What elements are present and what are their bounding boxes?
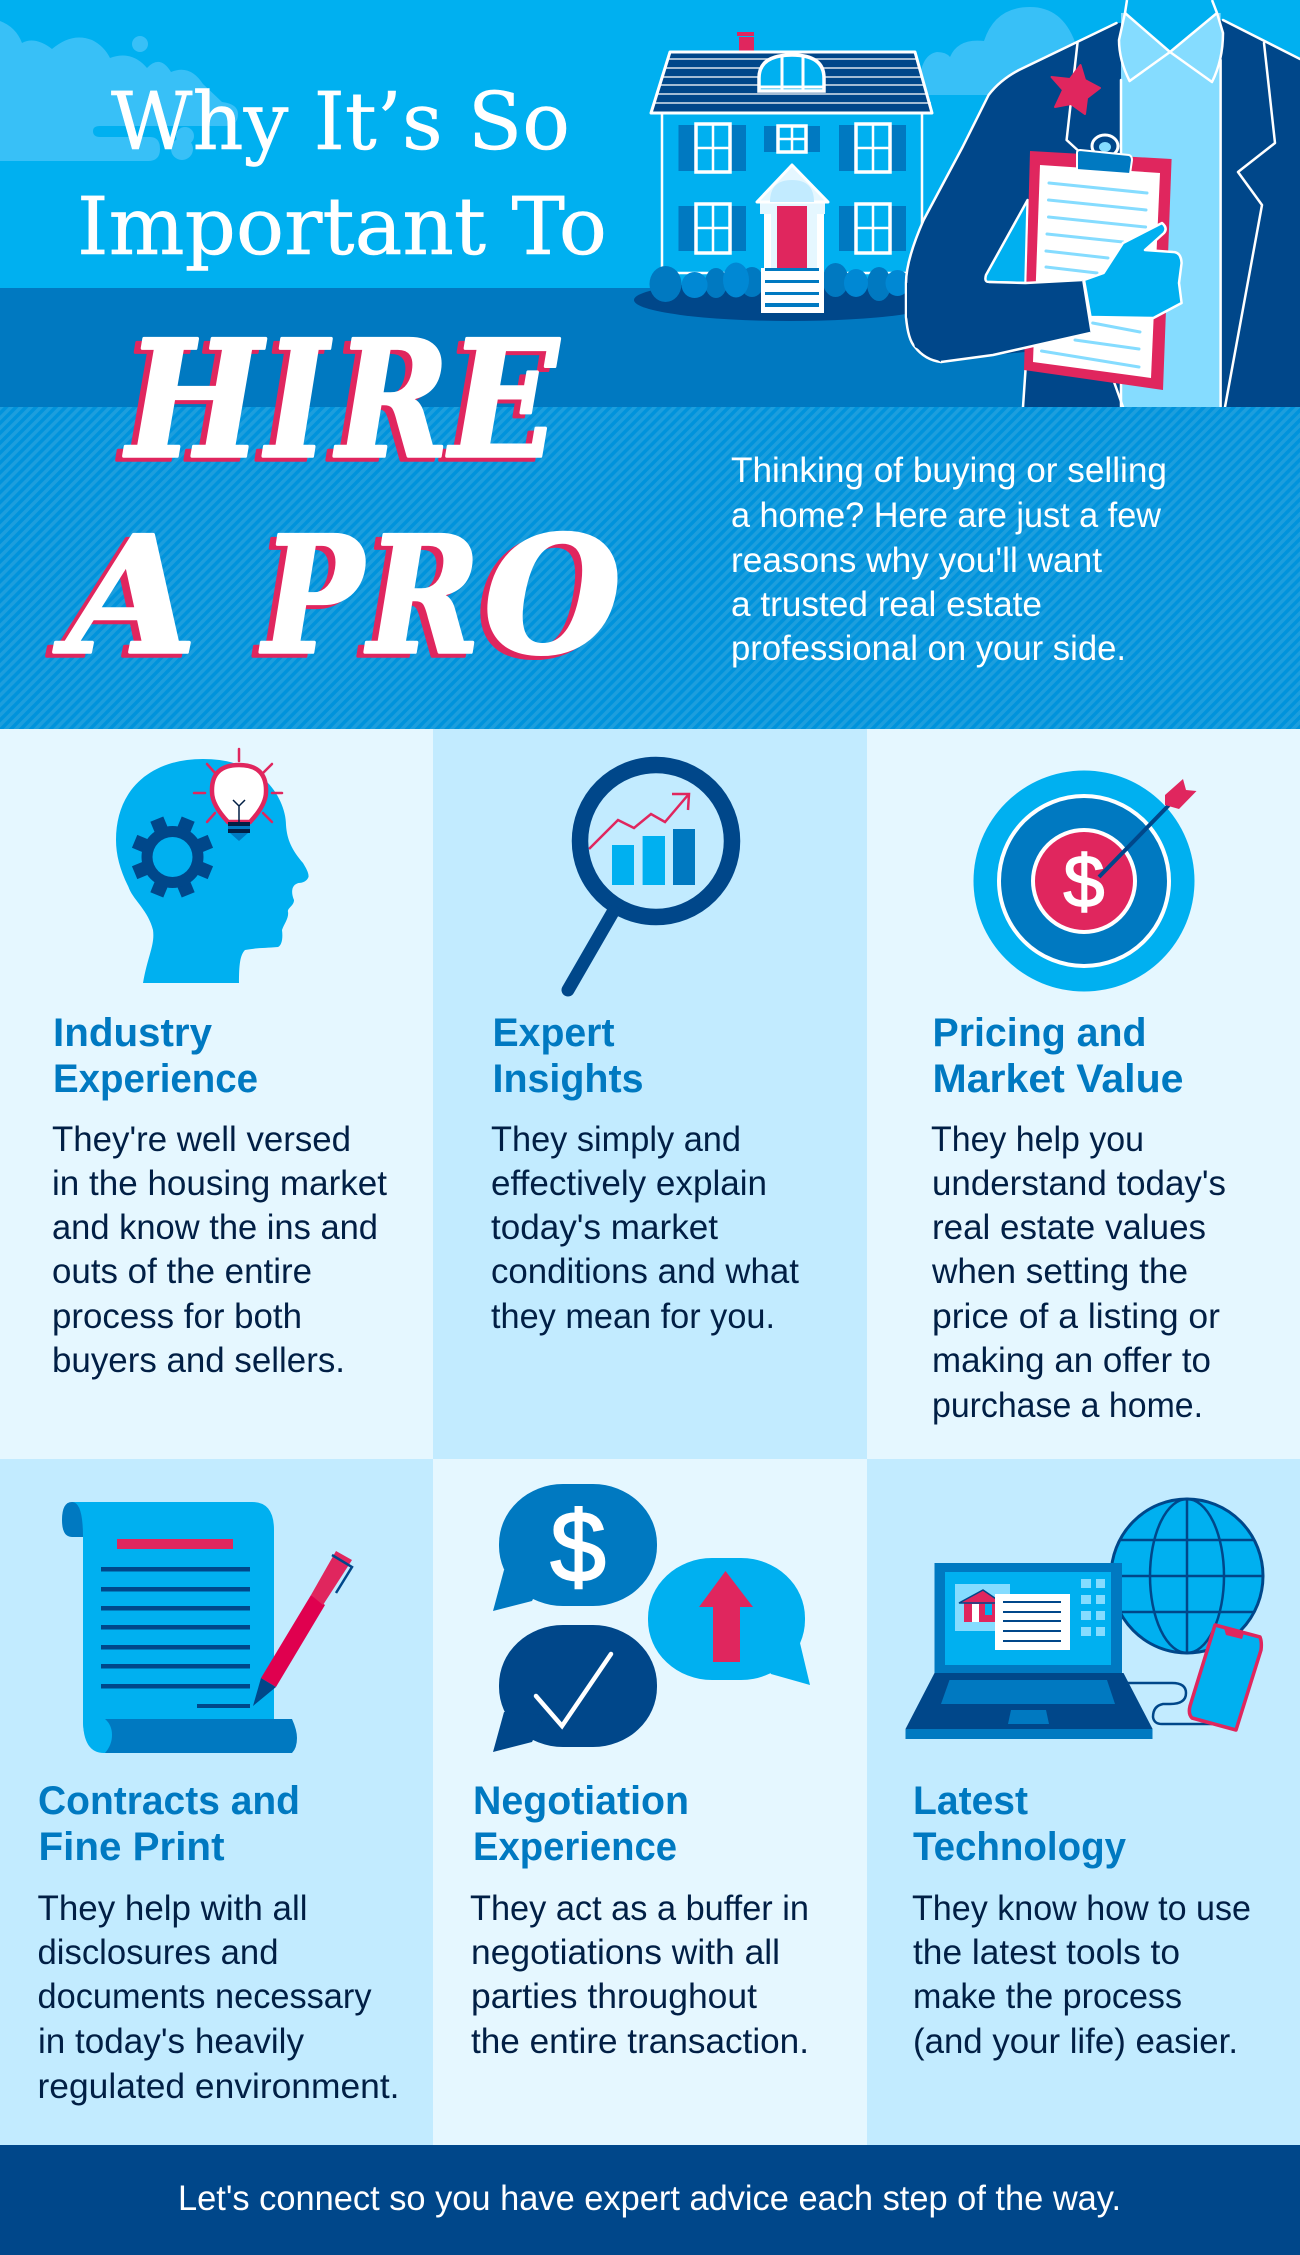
title: why it's so important to [77,75,607,273]
striped band background [0,407,1300,729]
icon: speech bubbles: $ [550,1491,606,1603]
decorative cloud right [919,7,1075,95]
heading: Experience [473,1825,677,1869]
heading: Contracts and [38,1779,300,1823]
body text: the entire transaction. [471,2022,809,2061]
heading [38,1779,300,1869]
body text: price of a listing or [932,1297,1220,1336]
body text: buyers and sellers. [52,1341,345,1380]
icon: laptop, globe and phone [906,1499,1263,1739]
body text: They act as a buffer in [470,1889,809,1928]
body text: in today's heavily [38,2022,304,2061]
icon: magnifying glass with chart [568,765,732,990]
body text [912,1889,1251,2061]
heading: Market Value [932,1057,1184,1101]
title: hire a pro: A [53,501,197,690]
heading: Fine Print [38,1825,224,1869]
panel: latest technology [867,1459,1300,2145]
intro text: professional on your side. [731,629,1126,668]
body text: regulated environment. [38,2067,399,2106]
panel: pricing and market value [867,729,1300,1459]
body text: negotiations with all [471,1933,780,1972]
body text: and know the ins and [52,1208,378,1247]
body text: documents necessary [38,1977,372,2016]
body text: disclosures and [38,1933,278,1972]
body text: conditions and what [491,1252,799,1291]
body text: they mean for you. [491,1297,775,1336]
title: hire a pro: E [446,305,560,494]
title: hire a pro: I [256,309,325,498]
panel: negotiation experience [433,1459,867,2145]
heading: Negotiation [473,1779,689,1823]
body text: They help you [931,1120,1144,1159]
title: hire a pro: R [327,309,442,498]
intro text: a trusted real estate [731,585,1042,624]
heading: Expert [492,1011,614,1055]
title: hire a pro: I [263,305,332,494]
body text: today's market [491,1208,718,1247]
heading: Insights [492,1057,644,1101]
body text: They're well versed [52,1120,351,1159]
body text: making an offer to [932,1341,1211,1380]
icon: head with gear and light bulb [116,749,309,983]
heading: Latest [913,1779,1028,1823]
body text: purchase a home. [932,1386,1203,1425]
title: why it's so important to: Why It’s So [111,75,570,168]
icon: target with dollar and arrow: $ [1063,840,1105,923]
body text [52,1120,387,1380]
intro text: Thinking of buying or selling [731,451,1167,490]
heading: Experience [53,1057,258,1101]
title: hire a pro: P [260,501,366,690]
body text: process for both [52,1297,302,1336]
intro text [731,451,1167,668]
title: hire a pro: E [439,309,553,498]
decorative cloud left [0,21,238,161]
title: hire a pro: H [123,305,266,494]
title: hire a pro: A [46,505,190,694]
heading [53,1011,258,1101]
icon: speech bubbles [493,1484,810,1752]
title: hire a pro: H [116,309,259,498]
body text: understand today's [932,1164,1226,1203]
body text [491,1120,799,1336]
heading [473,1779,689,1869]
title: hire a pro: R [334,305,449,494]
panel: contracts and fine print [0,1459,433,2145]
body text: when setting the [931,1252,1188,1291]
illustration: real estate agent with clipboard [906,0,1300,407]
body text: parties throughout [471,1977,757,2016]
panel: expert insights [433,729,867,1459]
footer banner: Let's connect so you have expert advice each step of the way. [178,2179,1121,2218]
footer banner [0,2145,1300,2255]
title: hire a pro: O [477,505,614,694]
icon: scroll document and pen [62,1502,352,1753]
illustration: house [634,32,946,321]
icon: target with dollar and arrow [974,770,1196,992]
title: why it's so important to: Important To [77,180,607,273]
title: hire a pro: P [253,505,359,694]
body text: outs of the entire [52,1252,312,1291]
body text: (and your life) easier. [913,2022,1238,2061]
title: hire a pro: R [358,505,473,694]
body text: in the housing market [52,1164,387,1203]
title: hire a pro [46,305,621,694]
heading [913,1779,1127,1869]
header background [0,0,1300,407]
intro text: reasons why you'll want [731,541,1102,580]
body text: the latest tools to [913,1933,1180,1972]
body text [38,1889,399,2106]
body text: They simply and [491,1120,741,1159]
title: hire a pro: R [365,501,480,690]
body text [931,1120,1226,1425]
heading: Pricing and [932,1011,1146,1055]
heading [932,1011,1184,1101]
panel: industry experience [0,729,433,1459]
title: hire a pro: O [484,501,621,690]
intro text: a home? Here are just a few [731,496,1162,535]
body text: effectively explain [491,1164,767,1203]
heading [492,1011,644,1101]
heading: Technology [913,1825,1127,1869]
body text: They know how to use [912,1889,1251,1928]
heading: Industry [53,1011,213,1055]
body text: make the process [913,1977,1182,2016]
body text: They help with all [38,1889,308,1928]
body text: real estate values [932,1208,1206,1247]
body text [470,1889,809,2061]
